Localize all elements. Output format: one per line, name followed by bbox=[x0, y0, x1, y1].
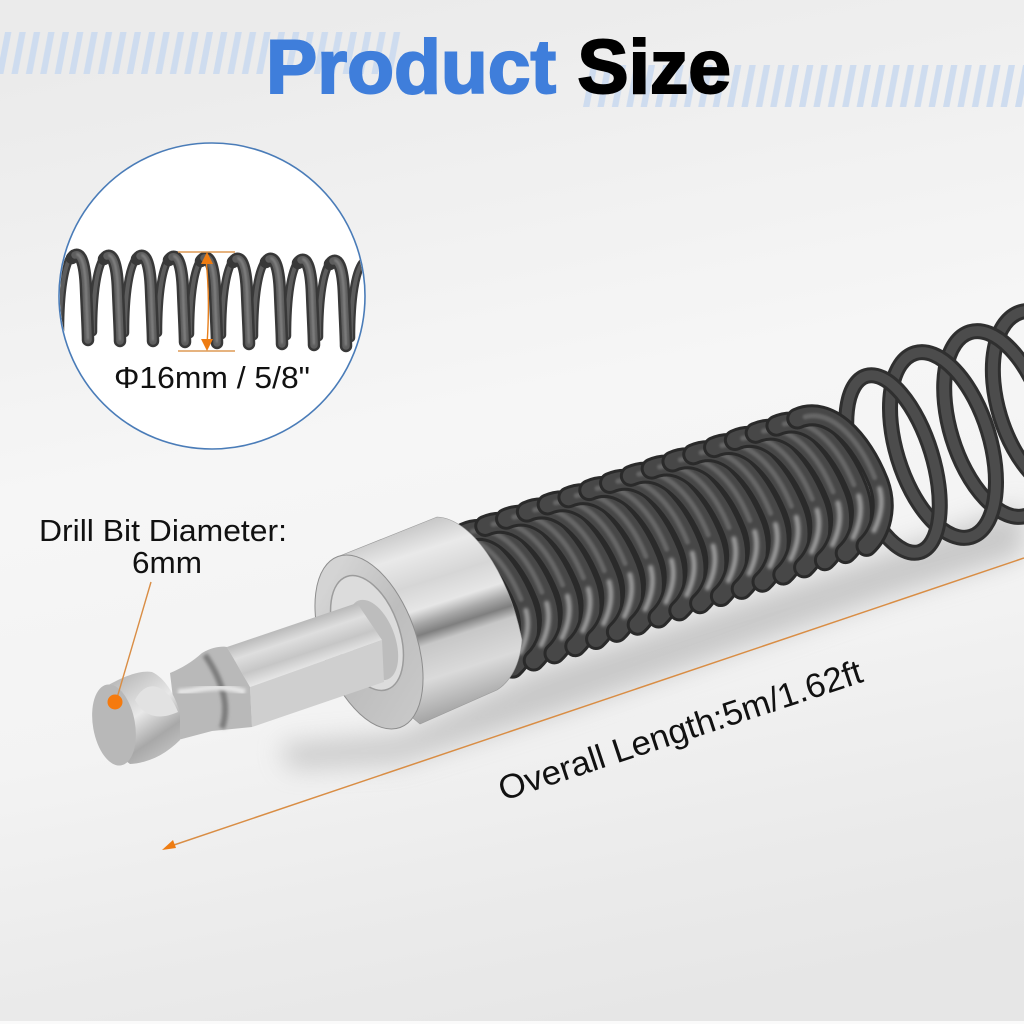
overall length arrow bbox=[162, 558, 1024, 850]
small spring detail bbox=[39, 253, 364, 346]
decorative stripe band right bbox=[583, 65, 1024, 107]
collar face bbox=[294, 540, 444, 744]
large spring bbox=[444, 297, 1024, 675]
ball head bbox=[104, 672, 180, 764]
tight coils on the tube bbox=[444, 400, 897, 675]
spring diameter label: Φ16mm / 5/8" bbox=[114, 360, 310, 395]
hex shank lower face bbox=[250, 640, 384, 727]
drill bit diameter label: 6mm bbox=[132, 545, 202, 580]
collar cylinder bbox=[337, 517, 522, 724]
drill bit diameter label bbox=[39, 513, 287, 580]
bottom edge strip bbox=[0, 1021, 1024, 1024]
tip flat face bbox=[86, 681, 142, 769]
magnifier circle bbox=[39, 143, 365, 449]
open coils at the far end bbox=[828, 297, 1024, 564]
shank grooved neck bbox=[170, 647, 252, 740]
silver drill adapter bbox=[86, 517, 522, 769]
title: Product Size bbox=[266, 25, 731, 110]
decorative stripe band left bbox=[0, 32, 403, 74]
diameter dimension marker bbox=[178, 252, 235, 351]
overall length label: Overall Length:5m/1.62ft bbox=[494, 653, 868, 809]
drill bit leader line and dot bbox=[108, 582, 151, 710]
soft shadow under tool bbox=[280, 505, 1024, 768]
drill bit diameter label: Drill Bit Diameter: bbox=[39, 513, 287, 548]
hex shank upper face bbox=[227, 603, 382, 687]
